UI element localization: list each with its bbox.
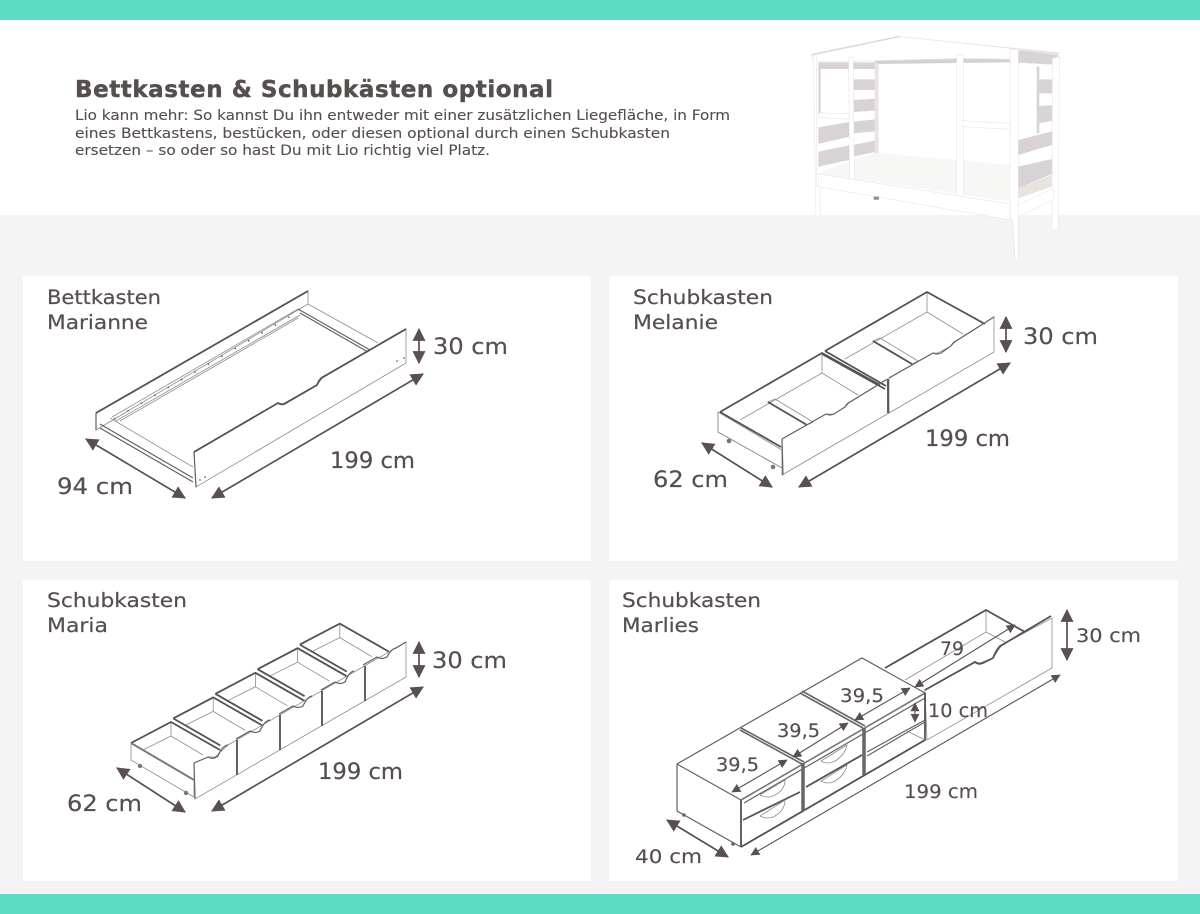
drawing: five drawers <box>131 624 406 799</box>
arrow: 94 cm width <box>86 439 185 498</box>
panel heading <box>633 286 773 334</box>
arrow: 30 cm height <box>1066 610 1068 660</box>
arrow: 10 cm height <box>914 703 916 722</box>
panel background <box>609 276 1178 561</box>
panel: Schubkasten Melanie <box>609 276 1178 561</box>
dimension: 199 cm: 199 cm <box>904 781 978 803</box>
compartment 2 <box>173 697 262 745</box>
panel heading: Schubkasten <box>47 589 187 612</box>
dimension: 30 cm: 30 cm <box>433 334 508 360</box>
arrow: 199 cm length <box>751 675 1060 855</box>
drawing: pull-out drawer <box>885 610 1052 740</box>
unit dividers <box>740 728 804 764</box>
dimension: 199 cm: 199 cm <box>925 426 1010 452</box>
rear drawer <box>822 292 985 389</box>
dimension: 39,5 right: 39,5 <box>840 685 884 707</box>
panel heading: Melanie <box>633 311 718 334</box>
panel heading: Schubkasten <box>633 286 773 309</box>
drawing: storage units <box>677 658 925 847</box>
dimension: 79: 79 <box>940 638 964 660</box>
panel heading <box>47 589 187 637</box>
dimension: 94 cm: 94 cm <box>57 474 133 500</box>
panel: Schubkasten Maria <box>23 580 591 881</box>
arrow: 30 cm height <box>418 642 420 677</box>
title: Bettkasten & Schubkästen optional <box>75 77 553 103</box>
roof gable <box>812 37 1013 62</box>
mattress <box>820 153 1010 202</box>
arrow: 62 cm width <box>117 768 185 812</box>
castors <box>138 764 142 768</box>
panel background <box>23 580 591 881</box>
dimension: 30 cm: 30 cm <box>1076 625 1141 647</box>
bed photo illustration <box>812 36 1062 261</box>
header background <box>0 20 1200 215</box>
castors <box>727 439 731 443</box>
panel heading: Marlies <box>622 614 699 637</box>
arrow: 30 cm height <box>1005 317 1007 352</box>
dimension: 39,5 left: 39,5 <box>716 754 759 776</box>
arrow: 62 cm width <box>702 443 772 487</box>
arrow: 199 cm length <box>212 687 423 811</box>
intro text block: ersetzen – so oder so hast Du mit Lio richtig viel Platz. <box>75 143 490 159</box>
dimension: 62 cm: 62 cm <box>67 791 142 817</box>
intro text block: eines Bettkastens, bestücken, oder diesen optional durch einen Schubkasten <box>75 126 670 142</box>
panel heading: Marianne <box>47 311 148 334</box>
arrow: 199 cm length <box>799 363 1010 487</box>
compartment 3 <box>215 673 304 721</box>
top teal bar <box>0 0 1200 20</box>
dimension: 199 cm: 199 cm <box>330 448 415 474</box>
compartment 1 <box>131 722 220 797</box>
panel: Schubkasten Marlies <box>609 580 1178 881</box>
drawer fronts <box>743 755 862 820</box>
front panels <box>782 379 889 475</box>
panel heading <box>622 589 761 637</box>
dimension: 40 cm: 40 cm <box>635 846 702 868</box>
bed hardware foot <box>874 197 879 200</box>
arrow: 30 cm height <box>418 329 420 363</box>
panel: Bettkasten Marianne <box>23 276 591 561</box>
arrow: 39,5 right <box>855 688 910 720</box>
front drawer <box>718 353 880 468</box>
drawing: two drawers <box>718 292 994 475</box>
intro text block: Lio kann mehr: So kannst Du ihn entweder mit einer zusätzlichen Liegefläche, in Form <box>75 108 730 124</box>
intro text block <box>75 108 730 159</box>
panel heading: Schubkasten <box>622 589 761 612</box>
bottom teal bar <box>0 894 1200 914</box>
dimension: 30 cm: 30 cm <box>432 648 507 674</box>
arrow: 40 cm width <box>667 820 728 857</box>
panel heading: Maria <box>47 614 108 637</box>
castors <box>682 813 686 817</box>
dimension: 10 cm: 10 cm <box>928 700 988 722</box>
handles <box>760 780 785 797</box>
dimension: 30 cm: 30 cm <box>1023 324 1098 350</box>
panel heading <box>47 286 161 334</box>
drawing: bed box <box>96 291 406 487</box>
dimension: 62 cm: 62 cm <box>653 467 728 493</box>
compartment 5 <box>300 624 389 672</box>
panel background <box>23 276 591 561</box>
dimension: 199 cm: 199 cm <box>318 759 403 785</box>
arrow: 39,5 left <box>732 760 787 792</box>
dimension: 39,5 middle: 39,5 <box>777 720 820 742</box>
panel background <box>609 580 1178 881</box>
arrow: 79 drawer depth <box>915 625 1015 687</box>
panel heading: Bettkasten <box>47 286 161 309</box>
compartment 4 <box>258 648 347 696</box>
arrow: 39,5 middle <box>793 723 848 757</box>
back slats and panels <box>818 50 1058 198</box>
front panels <box>194 642 406 799</box>
arrow: 199 cm length <box>212 374 423 498</box>
posts and frame <box>813 49 1059 261</box>
